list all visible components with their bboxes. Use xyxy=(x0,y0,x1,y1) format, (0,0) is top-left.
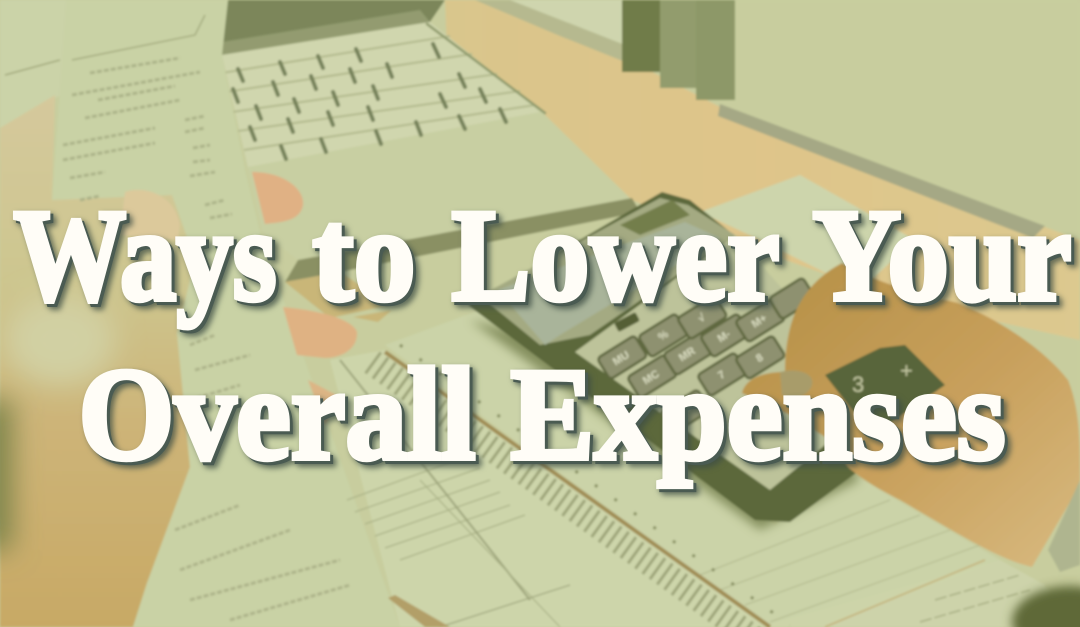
keyboard key gaps xyxy=(233,24,545,159)
shirt cuff xyxy=(1048,480,1080,572)
title line 1 xyxy=(14,182,1072,328)
calculator shadow xyxy=(470,320,860,530)
receipt xyxy=(52,0,400,627)
title line 1: to xyxy=(312,182,416,328)
power switch xyxy=(614,312,640,332)
calculator xyxy=(468,192,880,530)
calculator keys: % xyxy=(656,328,671,344)
title xyxy=(14,182,1072,488)
calculator body xyxy=(468,192,860,522)
notebook spiral binding xyxy=(372,345,790,627)
fingertip on receipt xyxy=(252,172,303,224)
laptop body xyxy=(222,22,632,262)
calculator keys: MR xyxy=(677,345,698,364)
calculator keys: MU xyxy=(611,349,632,368)
calculator face xyxy=(575,235,880,490)
calculator keys: 7 xyxy=(716,369,728,382)
window post xyxy=(622,0,735,100)
title line 2 xyxy=(78,340,1006,488)
hand shadow on the left edge xyxy=(0,400,12,550)
calculator keys: M+ xyxy=(750,312,769,331)
notebook bottom edge xyxy=(388,595,450,627)
laptop bezel xyxy=(222,0,445,55)
laptop xyxy=(222,0,640,318)
laptop shadow edge xyxy=(285,198,640,282)
right hand xyxy=(742,263,1080,567)
bottom-right sheet xyxy=(820,560,1045,627)
small pink fingertip xyxy=(308,380,340,425)
keyboard row gaps xyxy=(222,36,535,150)
dark keys below hand: 3 xyxy=(852,372,864,397)
window frame strip xyxy=(718,104,1045,238)
dark keys below hand: + xyxy=(900,358,913,383)
keyboard xyxy=(222,22,540,167)
loose paper under calculator xyxy=(700,175,915,290)
calculator display xyxy=(498,222,720,345)
calculator top plate xyxy=(480,198,735,345)
title line 2: Expenses xyxy=(510,340,1006,488)
dark keys below hand xyxy=(825,345,945,430)
calculator keys xyxy=(597,277,816,434)
dark corner blob xyxy=(1012,586,1080,627)
top-left paper xyxy=(0,0,70,128)
title line 2: Overall xyxy=(78,340,476,488)
yellow gap behind finger xyxy=(353,310,392,322)
left hand xyxy=(0,95,195,627)
receipt printed text xyxy=(63,58,350,620)
notebook page xyxy=(385,310,1050,627)
window sill strip xyxy=(475,0,625,62)
calculator keys: +/- xyxy=(676,404,693,421)
desk surface xyxy=(445,0,1080,340)
lower finger xyxy=(283,307,357,358)
left sheets xyxy=(330,350,770,627)
pale window patch left of post xyxy=(470,0,622,50)
calculator keys: √ xyxy=(696,311,708,325)
left hand thumb xyxy=(120,190,180,240)
calculator keys: M- xyxy=(716,328,733,345)
thumb xyxy=(780,371,812,398)
calculator keys: 8 xyxy=(754,352,766,365)
title line 1: Lower xyxy=(452,182,780,328)
calculator keys: MC xyxy=(641,368,662,387)
light area on hand xyxy=(5,295,115,385)
title line 1: Ways xyxy=(14,182,276,328)
